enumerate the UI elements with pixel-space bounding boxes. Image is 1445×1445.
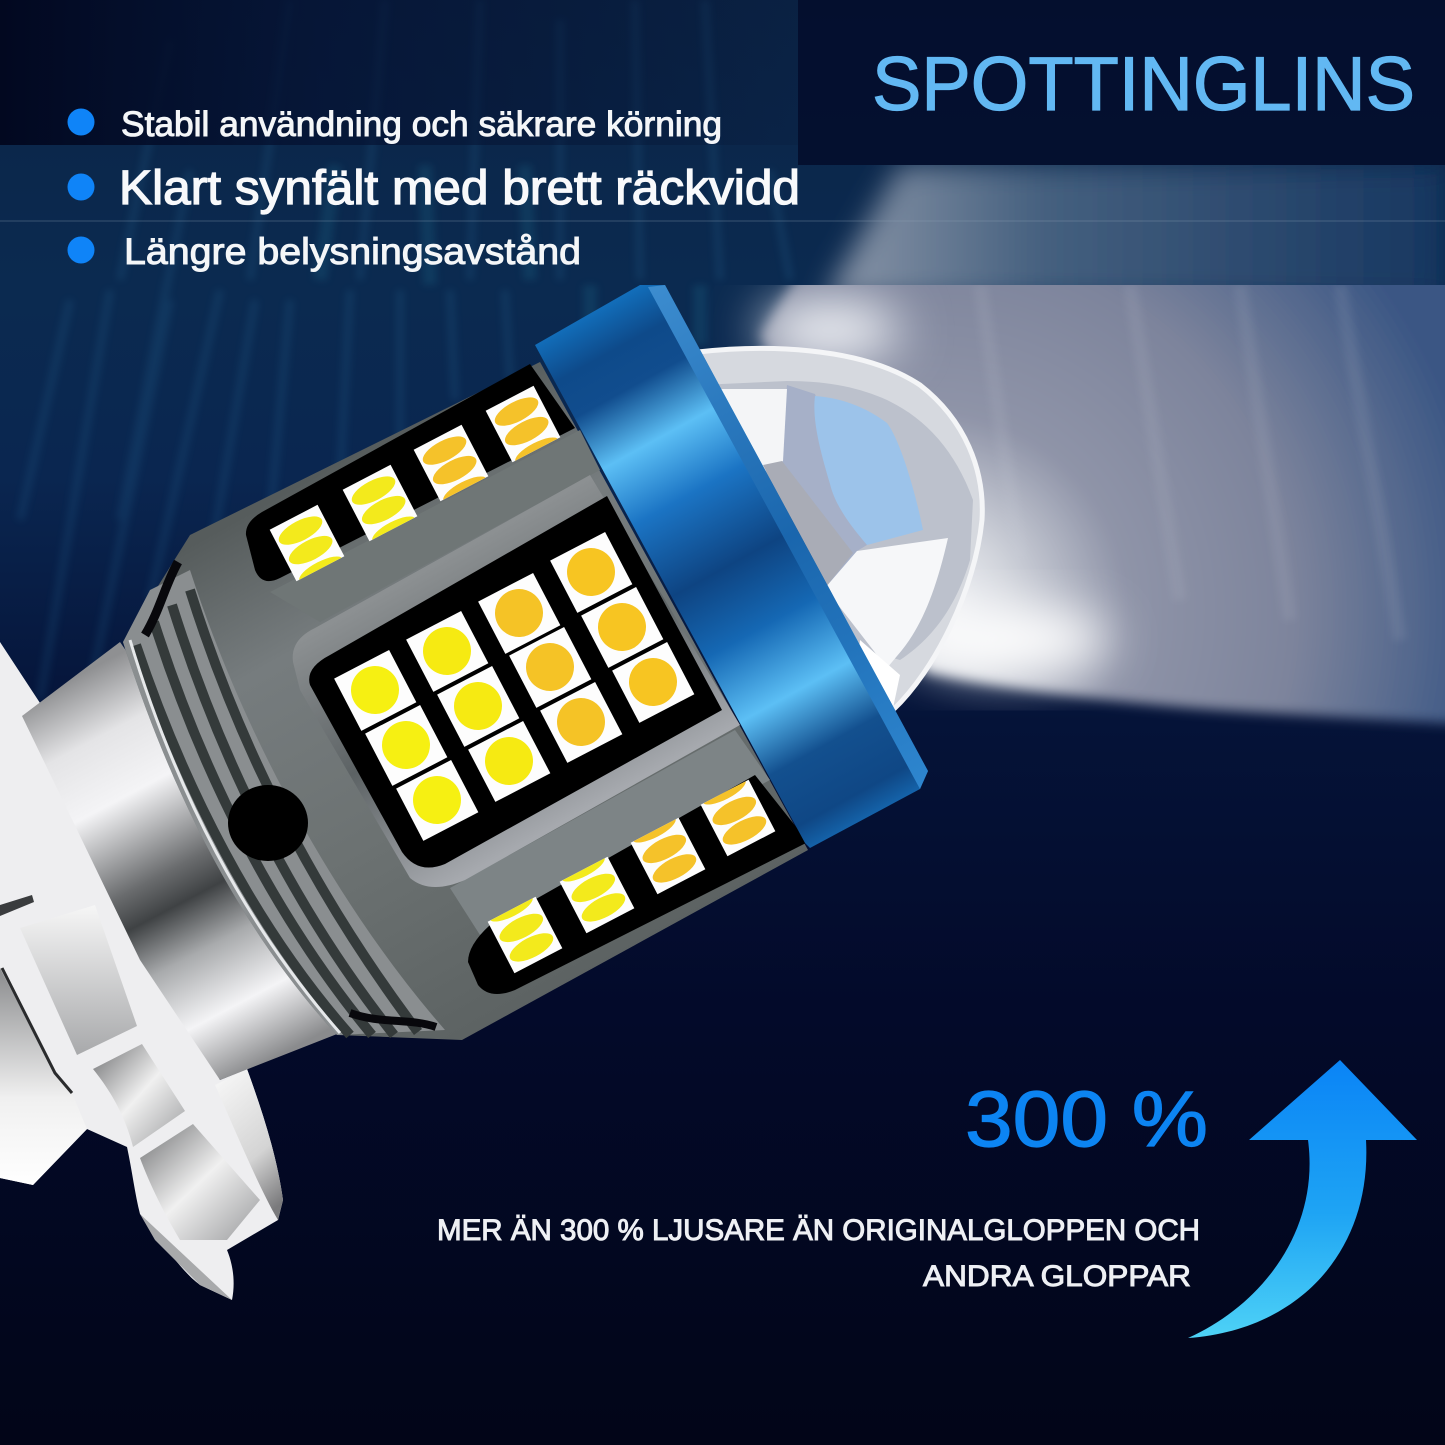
bullet 1: Stabil användning och säkrare körning [121,105,722,144]
lower window [140,1124,260,1240]
title panel [798,0,1445,165]
rib cutout marks [145,562,178,635]
black mounting hole [228,785,308,861]
lower rib mark [350,1013,436,1027]
metal socket flange [0,642,283,1300]
bullet 3: Längre belysningsavstånd [124,231,581,272]
bullet 2: Klart synfält med brett räckvidd [119,162,800,215]
top LED strip [246,364,575,589]
projector lens [650,348,982,760]
silver barrel [22,642,360,1080]
bottom LED strip [468,772,808,994]
bottom highlight strip [450,730,770,935]
ribbed band [123,570,445,1035]
lower left block [0,968,87,1185]
upper small window [93,1044,185,1147]
feature bullets [68,105,800,272]
light beam [760,165,1445,724]
grey ribbed body [123,362,808,1040]
main LED panel [293,475,740,887]
LED bulb [0,285,982,1300]
top highlight strip [270,430,600,622]
brightness description [437,1214,1200,1293]
socket slot [0,895,34,916]
title: SPOTTINGLINS [872,42,1415,127]
brightness description: ANDRA GLOPPAR [923,1260,1191,1293]
socket window [20,905,137,1055]
300 percent figure: 300 % [965,1074,1208,1163]
blue metal ring [535,285,928,848]
brightness description: MER ÄN 300 % LJUSARE ÄN ORIGINALGLOPPEN OCH [437,1214,1200,1247]
divider line [0,220,1445,222]
icon: upward curved arrow [1188,1060,1417,1338]
LED cells [334,532,694,841]
